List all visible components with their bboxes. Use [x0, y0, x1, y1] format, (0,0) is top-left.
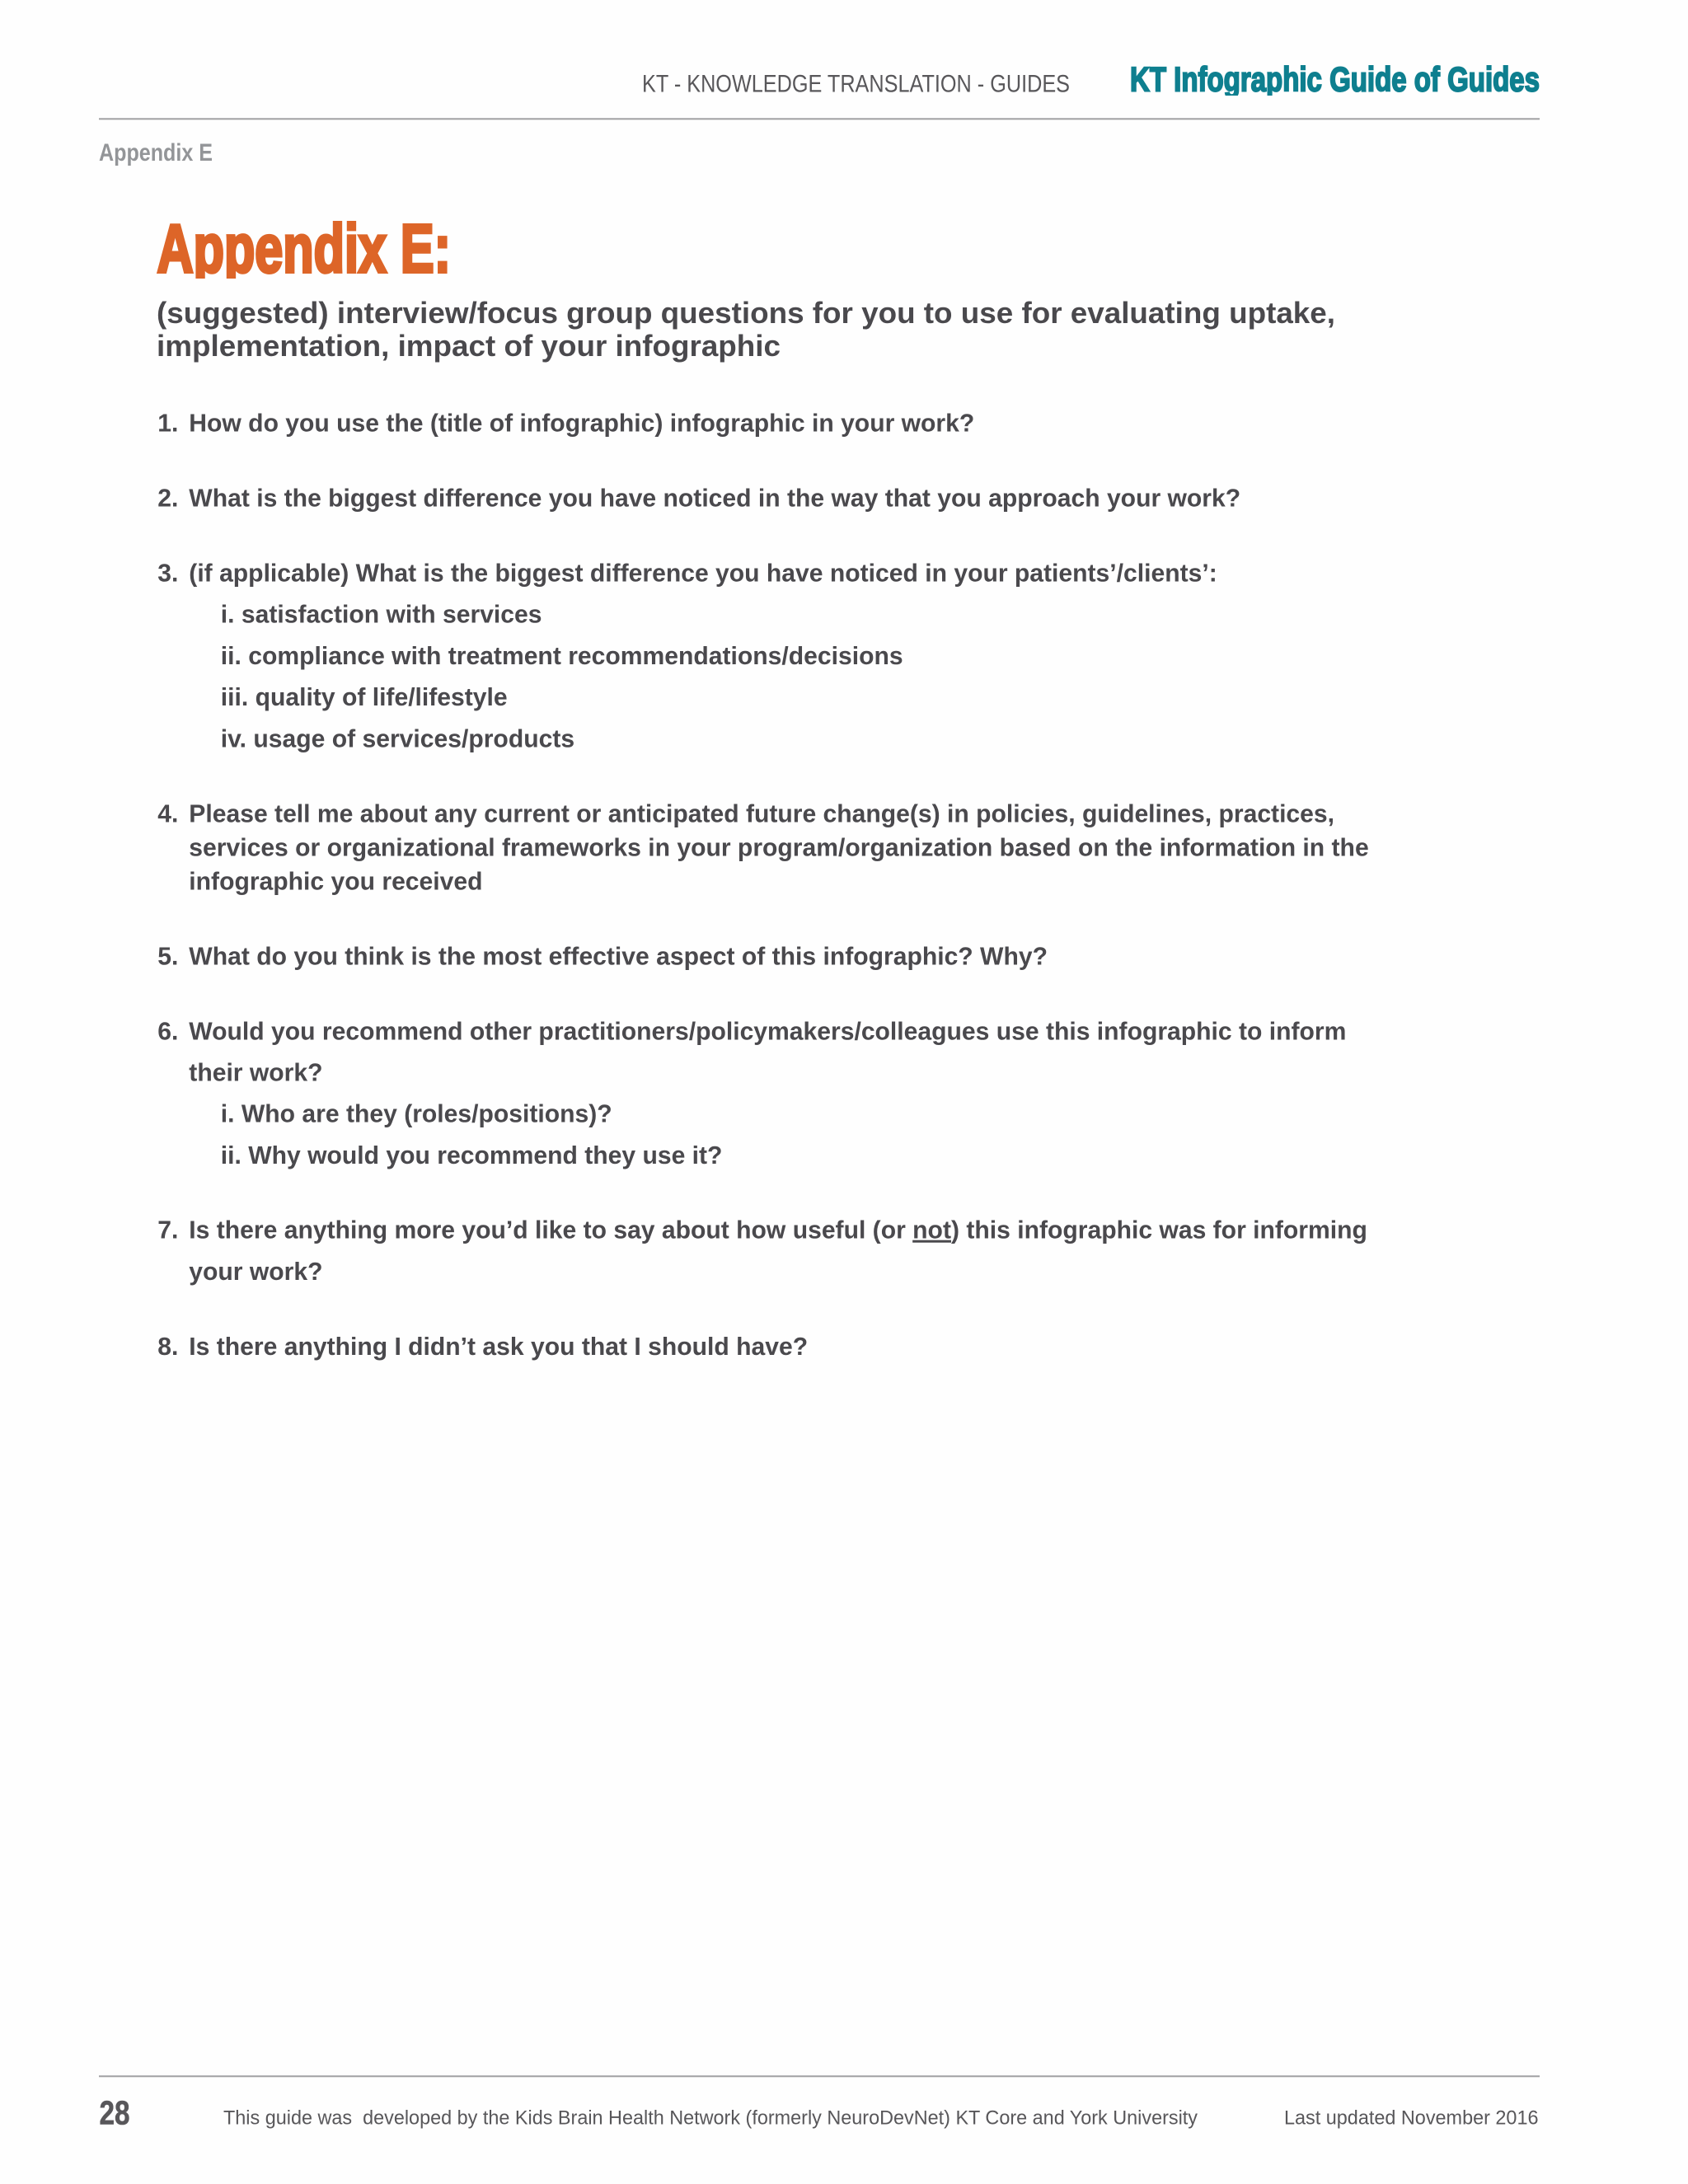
question 6: 6. — [157, 1019, 178, 1046]
question 4: infographic you received — [189, 869, 483, 896]
subtitle: implementation, impact of your infographic — [157, 329, 781, 363]
question 3 — [157, 560, 1217, 753]
question 7: your work? — [189, 1258, 323, 1286]
footer date: Last updated November 2016 — [1284, 2107, 1538, 2130]
question 8: Is there anything I didn’t ask you that I should have? — [189, 1333, 808, 1361]
title: Appendix E: — [157, 210, 451, 287]
question 3: 3. — [157, 560, 178, 588]
question 5: 5. — [157, 944, 178, 971]
question 4: 4. — [157, 801, 178, 828]
header guide title: KT Infographic Guide of Guides — [1130, 60, 1540, 99]
question 7: Is there anything more you’d like to say about how useful (or not) this infographic was for informing — [189, 1217, 1367, 1244]
question 5: What do you think is the most effective aspect of this infographic? Why? — [189, 944, 1048, 971]
question 3: iv. usage of services/products — [221, 726, 574, 753]
question 3: (if applicable) What is the biggest difference you have noticed in your patients’/clients’: — [189, 560, 1217, 588]
page footer — [99, 2094, 1538, 2132]
page number: 28 — [99, 2094, 130, 2132]
question 6: their work? — [189, 1060, 323, 1087]
question 1: How do you use the (title of infographic) infographic in your work? — [189, 410, 974, 438]
question 3: iii. quality of life/lifestyle — [221, 684, 508, 711]
question 8: 8. — [157, 1333, 178, 1361]
footer credit: This guide was developed by the Kids Brain Health Network (formerly NeuroDevNet) KT Core and York University — [223, 2107, 1198, 2130]
question 3: i. satisfaction with services — [221, 602, 542, 629]
question 4: Please tell me about any current or anticipated future change(s) in policies, guidelines, practices, — [189, 801, 1334, 828]
question 2: 2. — [157, 485, 178, 513]
question list — [157, 410, 1369, 1361]
question 6: ii. Why would you recommend they use it? — [221, 1142, 722, 1169]
question 3: ii. compliance with treatment recommendations/decisions — [221, 643, 903, 670]
question 4: services or organizational frameworks in your program/organization based on the information in the — [189, 835, 1369, 862]
subtitle — [157, 296, 1335, 363]
question 7: 7. — [157, 1217, 178, 1244]
section label: Appendix E — [99, 139, 213, 166]
question 6: i. Who are they (roles/positions)? — [221, 1101, 612, 1128]
question 1: 1. — [157, 410, 178, 438]
subtitle: (suggested) interview/focus group questions for you to use for evaluating uptake, — [157, 296, 1335, 330]
page header — [644, 65, 1540, 96]
question 4 — [157, 801, 1369, 896]
question 6: Would you recommend other practitioners/policymakers/colleagues use this infographic to inform — [189, 1019, 1346, 1046]
header label: KT - KNOWLEDGE TRANSLATION - GUIDES — [642, 71, 1070, 98]
question 6 — [157, 1019, 1346, 1169]
question 7 — [157, 1217, 1367, 1286]
question 2: What is the biggest difference you have noticed in the way that you approach your work? — [189, 485, 1240, 513]
